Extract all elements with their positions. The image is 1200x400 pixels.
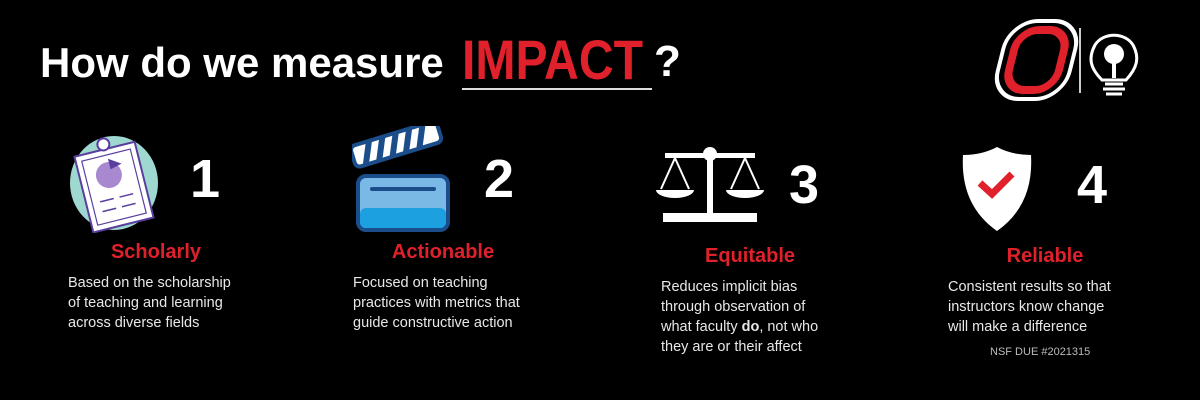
number 4: 4 <box>1077 155 1107 215</box>
text: scholarly: of teaching and learning <box>68 295 223 311</box>
grant note: NSF DUE #2021315 <box>990 346 1090 358</box>
title <box>40 28 681 91</box>
text: scholarly <box>68 275 231 331</box>
text: actionable: practices with metrics that <box>353 295 520 311</box>
text: equitable: they are or their affect <box>661 339 802 355</box>
icon: shield <box>962 147 1032 231</box>
title: ? <box>654 37 681 86</box>
icon: clapperboard <box>352 126 450 232</box>
text: reliable: instructors know change <box>948 299 1104 315</box>
heading: Actionable: Actionable <box>392 241 494 263</box>
text: equitable <box>661 279 818 355</box>
text: reliable <box>948 279 1111 335</box>
text: equitable: through observation of <box>661 299 805 315</box>
heading: Scholarly: Scholarly <box>111 241 201 263</box>
text: reliable: Consistent results so that <box>948 279 1111 295</box>
number 3: 3 <box>789 155 819 215</box>
logo <box>994 19 1138 101</box>
number 2: 2 <box>484 149 514 209</box>
text: equitable: Reduces implicit bias <box>661 279 797 295</box>
text: actionable: guide constructive action <box>353 315 513 331</box>
text: actionable <box>353 275 520 331</box>
text: reliable: will make a difference <box>948 319 1087 335</box>
text: equitable: what faculty do, not who <box>661 319 818 335</box>
icon: scale <box>656 147 764 222</box>
heading: Reliable: Reliable <box>1007 245 1083 267</box>
title: How do we measure <box>40 39 444 86</box>
heading: Equitable: Equitable <box>705 245 795 267</box>
text: scholarly: Based on the scholarship <box>68 275 231 291</box>
title: IMPACT <box>462 28 643 91</box>
text: actionable: Focused on teaching <box>353 275 488 291</box>
text: scholarly: across diverse fields <box>68 315 199 331</box>
number 1: 1 <box>190 149 220 209</box>
icon: clipboard <box>70 136 158 233</box>
